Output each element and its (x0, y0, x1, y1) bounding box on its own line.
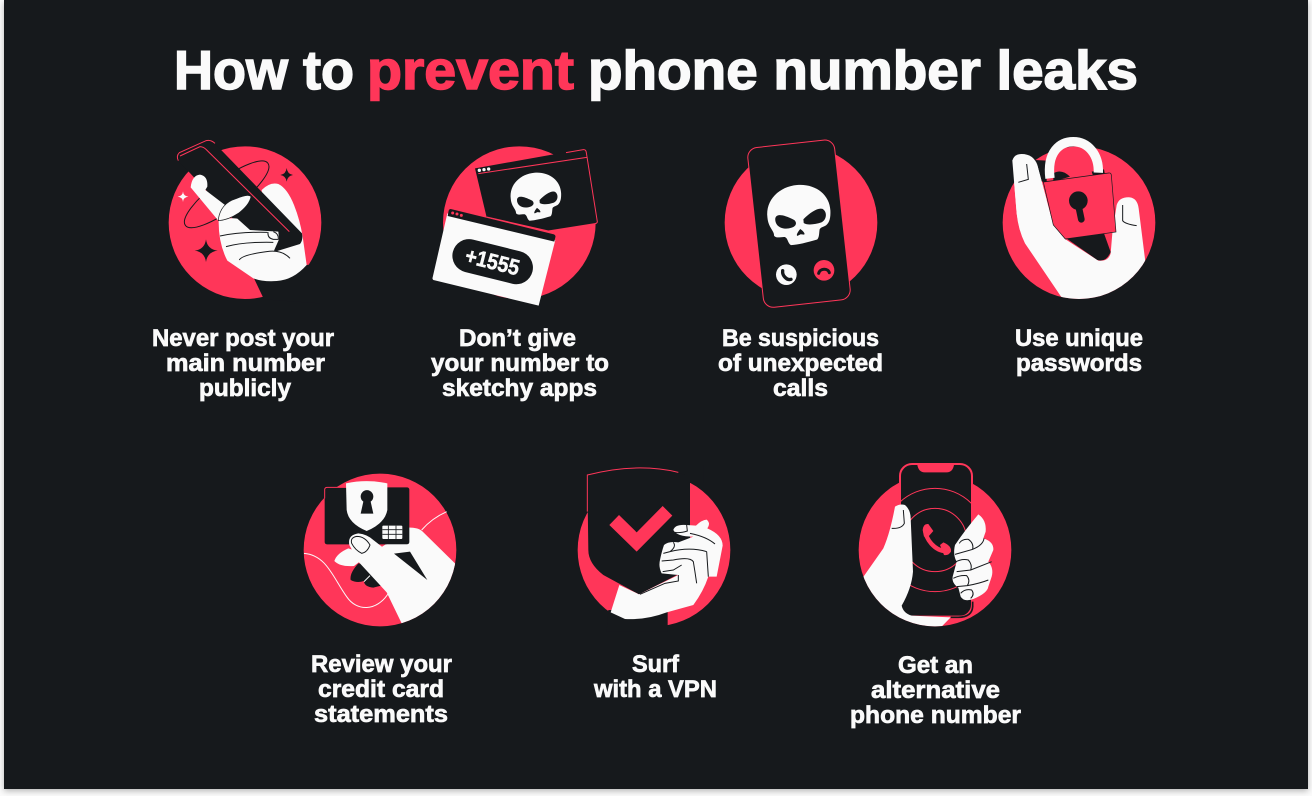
icon: incoming call with skull (725, 139, 877, 308)
icon: hand holding phone with sparkles (169, 140, 321, 303)
label: be suspicious of unexpected calls: of unexpected (718, 350, 883, 377)
label: never post your main number publicly: publicly (199, 375, 292, 402)
label: use unique passwords (1015, 325, 1143, 377)
label: get an alternative phone number (850, 652, 1021, 729)
label: don't give your number to sketchy apps: your number to (431, 350, 609, 377)
label: be suspicious of unexpected calls (718, 325, 883, 402)
label: don't give your number to sketchy apps: Don’t give (459, 325, 576, 352)
label: surf with a VPN (593, 651, 717, 703)
label: review your credit card statements (311, 651, 452, 728)
label: use unique passwords: passwords (1016, 350, 1142, 377)
label: never post your main number publicly: main number (166, 350, 325, 377)
label: surf with a VPN: with a VPN (593, 676, 717, 703)
icon: hand holding phone with call waves (859, 464, 1011, 632)
title: phone number leaks (588, 39, 1138, 101)
label: get an alternative phone number: Get an (898, 652, 973, 679)
label: surf with a VPN: Surf (632, 651, 680, 678)
label: don't give your number to sketchy apps: sketchy apps (442, 375, 597, 402)
title: prevent (367, 39, 574, 101)
label: use unique passwords: Use unique (1015, 325, 1143, 352)
label: don't give your number to sketchy apps (431, 325, 609, 402)
label: review your credit card statements: statements (314, 701, 448, 728)
infographic canvas (153, 48, 1156, 728)
label: never post your main number publicly (152, 325, 334, 402)
label: never post your main number publicly: Never post your (152, 325, 334, 352)
icon: hand holding credit card (304, 474, 457, 626)
title: How to (174, 39, 354, 101)
icon: skull window and number window: +1555 (463, 243, 522, 280)
label: get an alternative phone number: alternative (871, 677, 1000, 704)
label: review your credit card statements: Review your (311, 651, 452, 678)
title (174, 39, 1138, 101)
label: review your credit card statements: credit card (318, 676, 444, 703)
label: be suspicious of unexpected calls: Be suspicious (722, 325, 879, 352)
icon: skull window and number window (432, 146, 597, 306)
label: get an alternative phone number: phone number (850, 702, 1021, 729)
icon: hand holding padlock (1003, 142, 1155, 303)
label: be suspicious of unexpected calls: calls (773, 375, 828, 402)
icon: hand holding VPN shield (578, 465, 730, 632)
